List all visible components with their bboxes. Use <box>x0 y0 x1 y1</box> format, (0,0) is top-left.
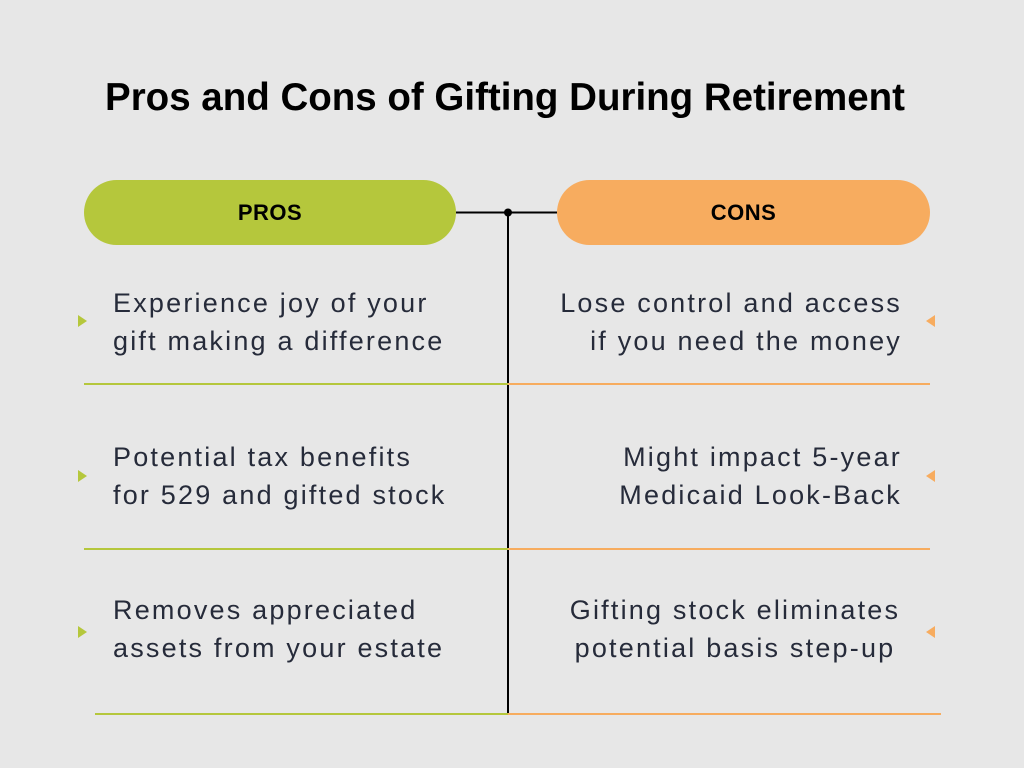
con 3: Gifting stock eliminates <box>570 595 900 625</box>
pro 2: for 529 and gifted stock <box>113 480 446 510</box>
pro 2: Potential tax benefits <box>113 442 412 472</box>
con 3 <box>570 595 900 663</box>
cons pill: CONS <box>711 200 776 225</box>
pro 2 <box>113 442 446 510</box>
pro 1: Experience joy of your <box>113 288 429 318</box>
con 2 <box>619 442 902 510</box>
con 1: Lose control and access <box>560 288 902 318</box>
pros pill: PROS <box>238 200 302 225</box>
pro 1 <box>113 288 444 356</box>
pros pill <box>84 180 456 245</box>
title: Pros and Cons of Gifting During Retirement <box>105 76 905 119</box>
con 1 <box>560 288 902 356</box>
con 3: potential basis step-up <box>575 633 895 663</box>
con 1: if you need the money <box>590 326 902 356</box>
con 2: Medicaid Look-Back <box>619 480 902 510</box>
pro 3: assets from your estate <box>113 633 444 663</box>
pro 1: gift making a difference <box>113 326 444 356</box>
pro 3 <box>113 595 444 663</box>
pro 3: Removes appreciated <box>113 595 417 625</box>
cons pill <box>557 180 930 245</box>
con 2: Might impact 5-year <box>623 442 902 472</box>
